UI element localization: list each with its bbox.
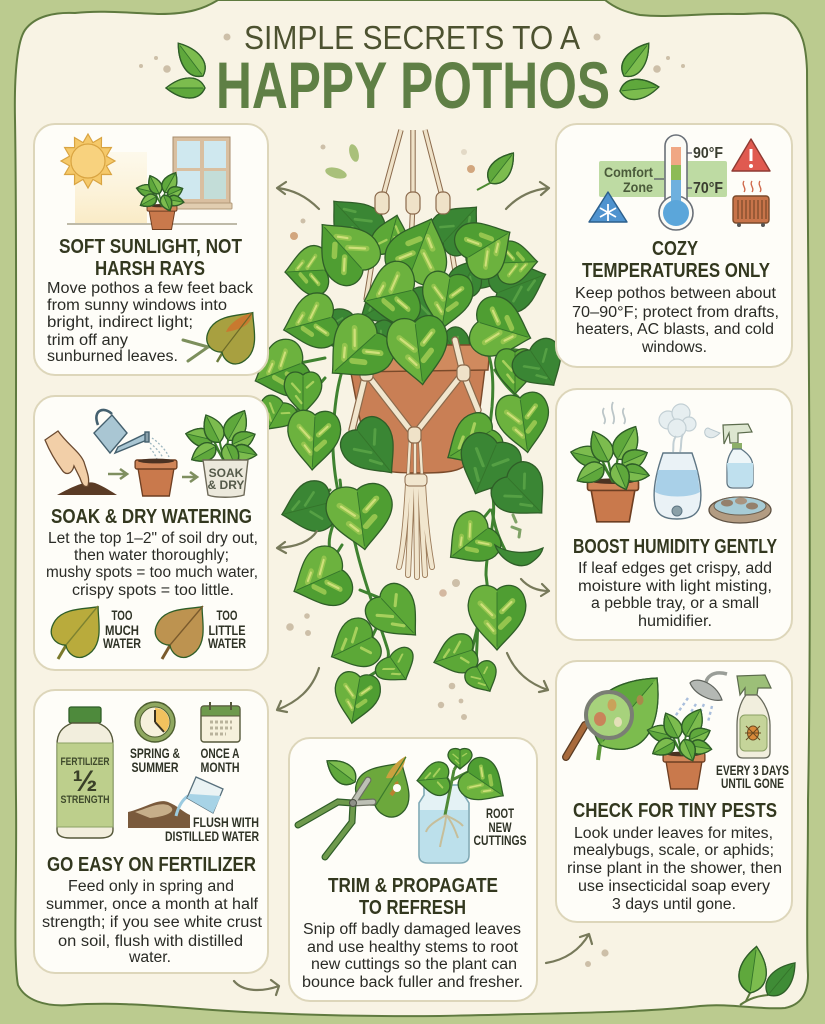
icon: thermometer <box>654 135 693 230</box>
icon: pruning shears <box>298 780 373 857</box>
icon: watering can <box>94 410 169 459</box>
icon: insecticidal soap bottle <box>737 675 771 758</box>
body text: mealybugs, scale, or aphids; <box>573 842 774 859</box>
title <box>216 19 610 122</box>
icon: brown underwatered leaf <box>149 591 221 663</box>
icon: plant in soak and dry pot: & DRY <box>208 478 244 492</box>
label: once a month <box>200 745 240 775</box>
body text: new cuttings so the plant can <box>311 956 517 973</box>
icon: fertilizer bottle: ½ <box>72 765 98 798</box>
central hanging pothos plant <box>245 130 575 727</box>
label: too little water: TOO <box>216 607 238 623</box>
body text <box>567 825 782 913</box>
panel: soft sunlight <box>34 124 272 375</box>
icon: fertilizer bottle: STRENGTH <box>60 794 110 806</box>
label: once a month: ONCE A <box>200 745 240 761</box>
icon: damaged leaf <box>349 748 425 823</box>
body text <box>572 285 779 356</box>
icon: calendar <box>201 702 240 742</box>
arrows from plant to cards <box>234 182 592 995</box>
label: once a month: MONTH <box>200 759 240 775</box>
body text: moisture with light misting, <box>578 578 772 595</box>
body text: summer, once a month at half <box>46 896 259 913</box>
panel: cozy temperatures <box>556 124 792 367</box>
body text <box>46 530 258 599</box>
arrow <box>182 472 197 482</box>
body text: Move pothos a few feet back <box>47 280 253 297</box>
label: every 3 days until gone <box>716 762 789 791</box>
body text: heaters, AC blasts, and cold <box>576 321 774 338</box>
label: flush with distilled water: DISTILLED WATER <box>165 828 259 844</box>
body text: crispy spots = too little. <box>72 582 234 599</box>
body text <box>578 560 772 630</box>
label: root new cuttings: NEW <box>488 819 512 835</box>
heading: SOAK & DRY WATERING <box>51 505 252 528</box>
comfort zone band <box>599 161 727 197</box>
body text: 70–90°F; protect from drafts, <box>572 304 779 321</box>
floating leaves and dots <box>286 143 609 967</box>
label: comfort zone <box>604 164 653 195</box>
icon: spray bottle <box>705 424 753 488</box>
icon: steam above plant <box>603 402 625 424</box>
label: comfort zone: Zone <box>623 179 653 195</box>
icon: heater <box>733 181 769 227</box>
label: every 3 days until gone: UNTIL GONE <box>721 775 784 791</box>
icon: snow triangle <box>589 192 627 222</box>
foliage leaves <box>245 205 575 727</box>
body text: windows. <box>641 339 707 356</box>
body text: use insecticidal soap every <box>578 878 770 895</box>
label: spring and summer <box>130 745 180 775</box>
heading <box>582 237 770 282</box>
body text: sunburned leaves. <box>47 348 178 365</box>
icon: plant in soak and dry pot <box>184 406 258 497</box>
icon: pebble tray <box>709 497 771 523</box>
body text <box>47 280 253 365</box>
icon: shower head and spray <box>660 673 727 738</box>
icon: soil and glass of water <box>128 777 223 828</box>
icon: soil mound <box>57 482 117 495</box>
body text: Let the top 1–2" of soil dry out, <box>48 530 258 547</box>
label: too much water: WATER <box>103 635 141 651</box>
icon: fertilizer bottle <box>57 707 113 838</box>
icon: potted plant <box>569 421 651 522</box>
label: too much water: TOO <box>112 607 133 623</box>
macrame knots <box>360 192 470 443</box>
body text: Keep pothos between about <box>575 285 777 302</box>
icon: shears and sunburned leaf <box>183 298 272 370</box>
body text: on soil, flush with distilled <box>58 933 243 950</box>
body text: from sunny windows into <box>47 297 227 314</box>
back leaves <box>307 184 555 379</box>
icon: terracotta pot <box>135 459 177 496</box>
label: every 3 days until gone: EVERY 3 DAYS <box>716 762 789 778</box>
heading <box>59 235 242 280</box>
icon: fertilizer bottle: FERTILIZER <box>60 756 110 768</box>
body text: a pebble tray, or a small <box>591 595 759 612</box>
body text <box>302 921 523 991</box>
icon: healthy small leaf <box>321 753 361 790</box>
heading: TRIM & PROPAGATE <box>328 874 498 897</box>
body text: 3 days until gone. <box>612 896 736 913</box>
body text: bright, indirect light; <box>47 314 193 331</box>
icon: yellow overwatered leaf <box>45 591 117 663</box>
title line 1: SIMPLE SECRETS TO A <box>244 19 580 56</box>
panel: soak and dry watering <box>34 396 268 670</box>
macrame hanger ropes <box>366 130 460 300</box>
icon: warning triangle <box>732 139 770 171</box>
label: too much water <box>103 607 141 651</box>
label: spring and summer: SPRING & <box>130 745 180 761</box>
icon: cutting in jar <box>416 749 515 863</box>
label: too little water: LITTLE <box>208 622 246 638</box>
trailing vines <box>290 335 530 680</box>
heading: HARSH RAYS <box>95 257 205 280</box>
label: spring and summer: SUMMER <box>132 759 178 775</box>
arrow <box>108 469 127 479</box>
icon: light beam <box>75 152 147 223</box>
macrame pot cradle and tassel <box>352 340 478 577</box>
icon: plant in soak and dry pot: SOAK <box>209 466 244 480</box>
corner leaves <box>737 945 803 1005</box>
heading: SOFT SUNLIGHT, NOT <box>59 235 242 258</box>
body text <box>42 878 263 966</box>
label: too little water: WATER <box>208 635 246 651</box>
heading: TEMPERATURES ONLY <box>582 259 770 282</box>
body text: and use healthy stems to root <box>307 939 519 956</box>
body text: then water thoroughly; <box>74 547 229 564</box>
body text: strength; if you see white crust <box>42 914 263 931</box>
terracotta pot <box>347 345 490 473</box>
icon: window <box>172 137 232 209</box>
body text: Look under leaves for mites, <box>574 825 773 842</box>
panel: fertilizer <box>34 690 268 973</box>
label: 90°F: 90°F <box>693 145 723 162</box>
heading <box>328 874 498 919</box>
heading: CHECK FOR TINY PESTS <box>573 799 777 822</box>
title line 2: HAPPY POTHOS <box>216 48 610 122</box>
label: root new cuttings: ROOT <box>486 805 514 821</box>
body text: water. <box>128 949 171 966</box>
body text: mushy spots = too much water, <box>46 564 258 581</box>
panel: tiny pests <box>556 659 792 922</box>
body text: Snip off badly damaged leaves <box>303 921 521 938</box>
body text: trim off any <box>47 332 128 349</box>
label: comfort zone: Comfort <box>604 164 653 180</box>
heading: COZY <box>652 237 698 260</box>
icon: humidifier <box>654 404 701 519</box>
label: too little water <box>208 607 246 651</box>
icon: hand testing soil <box>45 431 89 487</box>
body text: humidifier. <box>638 613 712 630</box>
icon: sun <box>61 134 115 188</box>
title decorations: leaves and dots <box>139 34 685 101</box>
heading: TO REFRESH <box>359 896 466 919</box>
icon: leaf under magnifier <box>566 659 680 764</box>
body text: rinse plant in the shower, then <box>567 860 782 877</box>
label: flush with distilled water <box>165 814 259 844</box>
heading: GO EASY ON FERTILIZER <box>47 853 256 876</box>
label: root new cuttings <box>474 805 526 848</box>
body text: If leaf edges get crispy, add <box>578 560 772 577</box>
icon: clock <box>135 702 175 742</box>
icon: potted plant <box>646 705 713 789</box>
icon: potted plant <box>135 169 185 229</box>
panel: boost humidity <box>556 389 792 640</box>
label: root new cuttings: CUTTINGS <box>474 832 526 848</box>
body text: bounce back fuller and fresher. <box>302 974 523 991</box>
folded leaf <box>495 545 543 566</box>
label: 70°F: 70°F <box>693 180 723 197</box>
body text: Feed only in spring and <box>68 878 234 895</box>
panel: trim and propagate <box>289 738 537 1001</box>
label: flush with distilled water: FLUSH WITH <box>193 814 259 830</box>
label: too much water: MUCH <box>105 622 139 638</box>
